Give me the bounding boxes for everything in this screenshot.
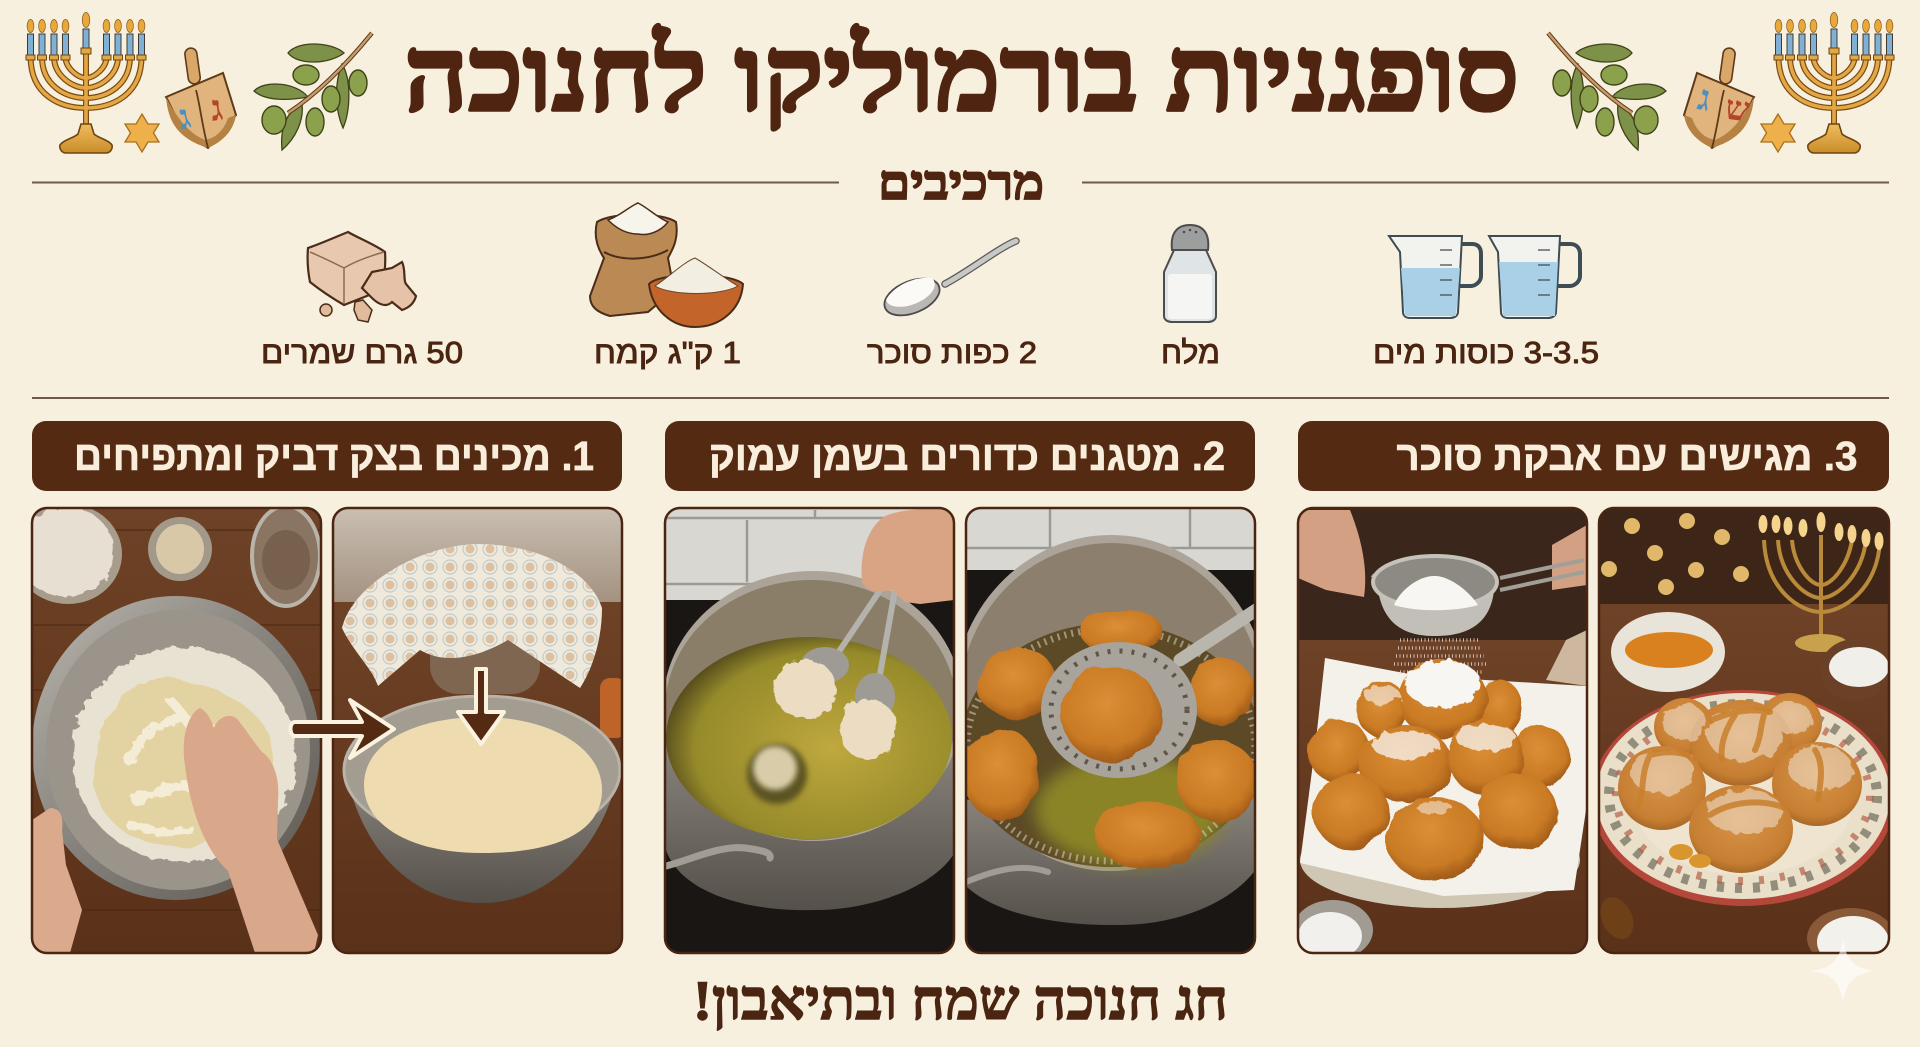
fried balls in oil	[963, 609, 1257, 868]
sparkle watermark	[1811, 939, 1875, 1003]
ingredients heading with rules: מרכיבים	[878, 157, 1044, 210]
pot	[953, 535, 1269, 925]
header decorations left: menorah, star, dreidel, olive branch: ג	[175, 99, 194, 137]
ingredient: sugar spoon	[867, 241, 1037, 370]
cloth over bowl	[342, 544, 602, 688]
mixing bowl with dough	[32, 596, 320, 900]
honey bowl	[1611, 612, 1725, 692]
hands	[1298, 510, 1587, 597]
sugar dish	[1807, 908, 1888, 952]
ingredient: salt shaker: מלח	[1161, 335, 1220, 370]
frying ball	[747, 744, 807, 804]
decorated plate	[1591, 690, 1895, 906]
ingredient: water cups: 3-3.5 כוסות מים	[1373, 335, 1599, 370]
salt bowl	[1826, 640, 1888, 687]
menorah	[1758, 512, 1884, 652]
honey dipper	[1600, 897, 1634, 939]
left hand	[32, 808, 82, 953]
closing greeting: חג חנוכה שמח ובתיאבון!	[693, 970, 1228, 1032]
photo panel: served doughnuts with honey and menorah	[1591, 508, 1895, 968]
photo panel: kneading dough in bowl	[14, 504, 321, 953]
pile of sugared doughnuts	[1308, 659, 1569, 881]
arrow: dough rises	[458, 669, 504, 744]
photo panel: spooning batter into oil	[663, 508, 963, 953]
ingredients row	[261, 203, 1599, 370]
terracotta pot	[600, 678, 621, 738]
title: סופגניות בורמוליקו לחנוכה	[404, 18, 1519, 133]
hand	[862, 508, 954, 604]
header decorations left: menorah, star, dreidel, olive branch	[26, 12, 372, 153]
photo panel: frying golden balls	[953, 508, 1269, 953]
batter dollops	[774, 659, 897, 759]
plate	[1300, 853, 1580, 908]
arrow: dough to rising	[290, 700, 394, 758]
skimmer with fried ball	[1041, 610, 1256, 778]
ingredient: sugar spoon: 2 כפות סוכר	[867, 335, 1037, 370]
ingredient: salt shaker	[1161, 225, 1220, 370]
step 1 heading: 1. מכינים בצק דביק ומתפיחים	[74, 433, 594, 479]
water glass	[252, 506, 320, 606]
ingredient: water cups	[1373, 236, 1599, 370]
step 2 heading	[665, 421, 1255, 491]
step 1 heading	[32, 421, 622, 491]
flour bowl	[33, 509, 122, 604]
ingredient: yeast	[261, 232, 463, 370]
risen dough bowl	[344, 696, 620, 903]
cloth	[1546, 630, 1587, 686]
photo panel: covered bowl and risen dough	[333, 508, 626, 953]
header decorations right: menorah, star, dreidel, olive branch	[1548, 12, 1894, 153]
ingredient: flour: 1 ק"ג קמח	[594, 335, 741, 370]
yeast bowl	[148, 517, 212, 581]
header decorations right: menorah, star, dreidel, olive branch: ש	[1723, 90, 1752, 130]
right hand	[184, 708, 318, 953]
falling sugar	[1394, 640, 1486, 672]
pot with oil	[663, 571, 963, 910]
sugar bowl	[1299, 900, 1373, 952]
spoons	[838, 590, 895, 680]
ingredient: yeast: 50 גרם שמרים	[261, 335, 463, 370]
step 3 heading: 3. מגישים עם אבקת סוכר	[1396, 433, 1858, 479]
bokeh lights	[1601, 513, 1749, 595]
ingredient: flour	[590, 203, 743, 370]
step 2 heading: 2. מטגנים כדורים בשמן עמוק	[709, 433, 1225, 479]
photo panel: sifting powdered sugar	[1293, 508, 1587, 960]
sieve with sugar	[1372, 556, 1584, 636]
paper towel	[1300, 658, 1586, 896]
header decorations left: menorah, star, dreidel, olive branch: ג	[208, 87, 225, 129]
step 3 heading	[1298, 421, 1889, 491]
served doughnuts	[1618, 693, 1862, 873]
header decorations right: menorah, star, dreidel, olive branch: ג	[1695, 77, 1714, 119]
